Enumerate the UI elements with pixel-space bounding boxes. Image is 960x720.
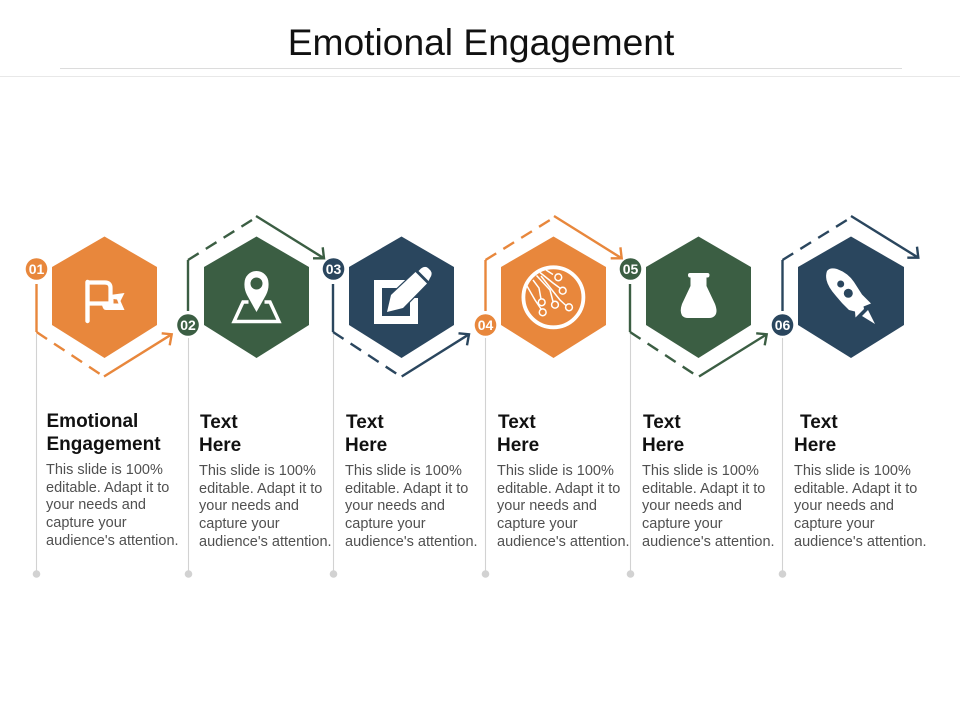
badge 01: 01 — [29, 261, 44, 277]
text: step 05: Here — [642, 435, 684, 456]
text: step 06: Here — [794, 435, 836, 456]
text: step 04: audience's attention. — [497, 534, 630, 550]
title: Emotional Engagement — [288, 21, 675, 63]
hexagon 03 — [349, 236, 454, 358]
badge 04: 04 — [478, 317, 493, 333]
text: step 04: your needs and — [497, 498, 597, 514]
badge 01 — [26, 258, 47, 280]
badge 06 — [772, 314, 793, 336]
badge 05: 05 — [623, 261, 638, 277]
text: step 05: This slide is 100% — [642, 463, 759, 479]
panel: step 04 — [475, 216, 630, 578]
text: step 03: your needs and — [345, 498, 445, 514]
text: step 04: This slide is 100% — [497, 463, 614, 479]
connector arrow 06 — [782, 216, 918, 311]
text: step 06: editable. Adapt it to — [794, 481, 917, 497]
text: step 01: editable. Adapt it to — [46, 480, 169, 496]
connector arrow 05 — [630, 284, 767, 376]
icon: circuit circle — [523, 267, 583, 327]
badge 06: 06 — [775, 317, 790, 333]
text: step 03: audience's attention. — [345, 534, 478, 550]
text: step 01: Engagement — [46, 434, 161, 455]
text: step 02: capture your — [199, 516, 280, 532]
text: step 04: capture your — [497, 516, 578, 532]
text: step 03: capture your — [345, 516, 426, 532]
badge 02 — [177, 314, 199, 336]
text: step 03: This slide is 100% — [345, 463, 462, 479]
text: step 03: Text — [346, 412, 384, 433]
text: step 01 — [46, 411, 179, 549]
hexagon 01 — [52, 236, 157, 358]
text: step 03: Here — [345, 435, 387, 456]
hexagon 04 — [501, 236, 606, 358]
text: step 04 — [497, 412, 630, 550]
text: step 02: Here — [199, 435, 241, 456]
panel: step 06 — [772, 216, 927, 578]
text: step 06: Text — [800, 412, 838, 433]
badge 02: 02 — [180, 317, 196, 333]
text: step 05: capture your — [642, 516, 723, 532]
connector arrow 01 — [36, 284, 172, 376]
badge 04 — [475, 314, 496, 336]
text: step 02: audience's attention. — [199, 534, 332, 550]
text: step 03: editable. Adapt it to — [345, 481, 468, 497]
text: step 05 — [642, 412, 775, 550]
panel: step 03 — [323, 236, 478, 578]
text: step 04: Text — [498, 412, 536, 433]
hexagon 02 — [204, 236, 309, 358]
icon: rocket — [826, 268, 875, 324]
badge 03: 03 — [326, 261, 341, 277]
text: step 06 — [794, 412, 927, 550]
hexagon 06 — [798, 236, 904, 358]
text: step 05: editable. Adapt it to — [642, 481, 765, 497]
panel: step 01 — [26, 236, 179, 578]
text: step 01: capture your — [46, 515, 127, 531]
icon: flag — [87, 282, 124, 321]
text: step 02: editable. Adapt it to — [199, 481, 322, 497]
text: step 02: This slide is 100% — [199, 463, 316, 479]
text: step 06: audience's attention. — [794, 534, 927, 550]
text: step 03 — [345, 412, 478, 550]
connector arrow 04 — [486, 216, 622, 311]
hexagon 05 — [646, 236, 751, 358]
connector arrow 03 — [333, 284, 469, 376]
text: step 04: editable. Adapt it to — [497, 481, 620, 497]
text: step 01: audience's attention. — [46, 533, 179, 549]
panel: step 05 — [620, 236, 775, 578]
icon: map pin — [234, 271, 279, 322]
connector arrow 02 — [188, 216, 324, 311]
badge 03 — [323, 258, 344, 280]
text: step 05: your needs and — [642, 498, 742, 514]
icon: edit — [374, 267, 432, 324]
text: step 04: Here — [497, 435, 539, 456]
text: step 01: This slide is 100% — [46, 462, 163, 478]
text: step 06: your needs and — [794, 498, 894, 514]
panel: step 02 — [177, 216, 332, 578]
text: step 02: Text — [200, 412, 238, 433]
text: step 05: Text — [643, 412, 681, 433]
text: step 01: Emotional — [46, 411, 138, 432]
text: step 02 — [199, 412, 332, 550]
text: step 01: your needs and — [46, 497, 146, 513]
text: step 05: audience's attention. — [642, 534, 775, 550]
text: step 06: capture your — [794, 516, 875, 532]
badge 05 — [620, 258, 641, 280]
icon: flask — [681, 273, 716, 318]
text: step 02: your needs and — [199, 498, 299, 514]
text: step 06: This slide is 100% — [794, 463, 911, 479]
